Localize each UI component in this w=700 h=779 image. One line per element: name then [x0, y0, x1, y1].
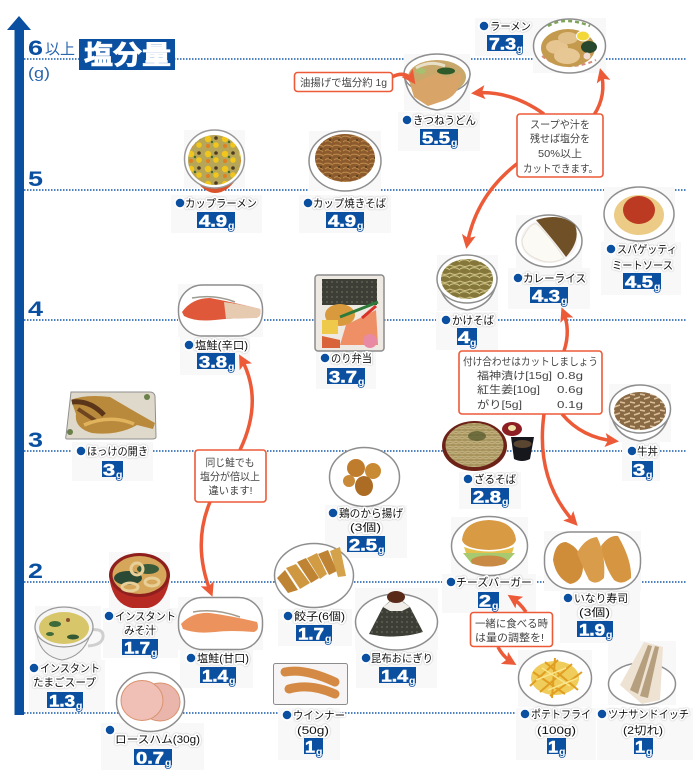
name: チーズバーガー [456, 575, 532, 589]
value: 4 [458, 328, 471, 347]
value [634, 738, 653, 758]
axis tick labels: 1 [30, 691, 38, 714]
axis tick labels: (g) [28, 65, 50, 82]
value: 3 [633, 460, 645, 480]
food: ツナサンドイッチ(2切れ) 1g [597, 641, 693, 760]
name: ウインナー [293, 709, 345, 722]
arrow: sides note to curry rice [563, 311, 567, 351]
bullet [513, 273, 523, 283]
icon: ramen bowl [533, 18, 606, 73]
axis tick labels: 以上 [45, 41, 75, 58]
name line 2: (50g) [297, 725, 329, 737]
food: 牛丼 3g [609, 384, 671, 481]
callout: adjust portion: 一緒に食べる時 [475, 617, 548, 630]
value [327, 368, 365, 388]
name: カレーライス [523, 272, 586, 285]
bullet [29, 663, 39, 673]
callout: abura-age salt: 油揚げで塩分約 1g [300, 76, 387, 89]
arrow: combo note to burger [511, 597, 526, 612]
value: g [516, 43, 523, 55]
food: カップラーメン 4.9g [171, 130, 262, 233]
icon: nori bento [315, 275, 384, 351]
value: 7.3 [489, 34, 516, 54]
callout: leave the soup: 残せば塩分を [530, 132, 590, 145]
label panel [180, 335, 250, 375]
value [420, 128, 458, 149]
label panel [516, 708, 596, 760]
icon: salted salmon, salty [178, 284, 263, 337]
arrow: sides note to gyudon [562, 414, 615, 441]
icon: gyudon bowl [609, 384, 671, 442]
callout: cut the side dishes: 0.8g [557, 370, 583, 382]
value [102, 460, 123, 481]
value: g [357, 220, 363, 232]
name line 2: ミートソース [612, 260, 673, 272]
value: 1 [548, 738, 558, 756]
label panel [316, 352, 376, 389]
bullet [303, 198, 313, 208]
label panel [622, 442, 660, 481]
label panel [171, 195, 262, 233]
name line 2: (100g) [537, 725, 576, 737]
food: 鶏のから揚げ(3個) 2.5g [325, 448, 407, 558]
name: 鶏のから揚げ [339, 506, 403, 520]
callout: cut the side dishes [459, 351, 602, 414]
icon: gyoza plate [274, 544, 354, 608]
bullet [479, 21, 489, 31]
value: g [561, 295, 567, 307]
callout: adjust portion [470, 612, 552, 646]
value: 4.9 [328, 212, 356, 230]
value [296, 624, 332, 645]
value: g [451, 137, 457, 149]
bullet [446, 577, 456, 587]
value axis arrow [7, 16, 31, 715]
bullet [463, 474, 473, 484]
icon: cup yakisoba [309, 131, 381, 191]
name: 塩鮭(辛口) [195, 338, 248, 352]
value: 0.7 [136, 748, 164, 768]
name line 2: (2切れ) [623, 724, 663, 737]
food: インスタントたまごスープ 1.3g [29, 606, 105, 712]
label panel [72, 442, 153, 481]
label panel [597, 708, 693, 760]
name: ほっけの開き [87, 445, 148, 458]
label panel [436, 312, 498, 350]
value [326, 212, 364, 232]
callout: cut the side dishes: 0.6g [557, 384, 583, 396]
value: 3.8 [199, 352, 227, 372]
callout: leave the soup: 50%以上 [538, 148, 582, 160]
icon: tuna sandwich plate [608, 641, 676, 705]
value: 1.4 [381, 666, 409, 686]
value [197, 352, 235, 373]
axis tick labels: 5 [28, 168, 43, 191]
label panel [398, 112, 480, 151]
value [478, 592, 499, 612]
value: 3 [103, 460, 115, 480]
arrow: soup note to ramen [594, 72, 603, 115]
callout: same salmon [195, 450, 266, 502]
callout: cut the side dishes: 福神漬け[15g] [477, 369, 552, 382]
callout: same salmon: 同じ鮭でも [206, 456, 254, 469]
value: 4.9 [199, 212, 227, 230]
name: 昆布おにぎり [371, 651, 433, 665]
icon: ham plate [116, 672, 184, 732]
label panel [508, 268, 590, 309]
value [623, 272, 661, 293]
label panel [325, 505, 407, 558]
food: ラーメン 7.3g [475, 18, 606, 73]
value [471, 488, 509, 508]
name line 2: (3個) [579, 606, 610, 619]
icon: zaru soba [442, 421, 534, 471]
value [632, 460, 653, 481]
food: ウインナー(50g) 1g [274, 664, 348, 760]
bullet [105, 725, 115, 735]
gridlines [24, 59, 687, 713]
name: きつねうどん [413, 114, 476, 127]
callout: leave the soup [517, 114, 603, 177]
callout: cut the side dishes: 紅生姜[10g] [477, 383, 540, 396]
value: g [492, 600, 498, 612]
value: 1.9 [579, 620, 605, 640]
label panel [278, 708, 340, 760]
name: かけそば [452, 314, 494, 327]
value [347, 536, 385, 556]
value [379, 666, 416, 687]
name: 塩鮭(甘口) [197, 651, 249, 665]
food: のり弁当 3.7g [315, 275, 384, 389]
value: 3.7 [329, 368, 357, 386]
label panel [601, 242, 681, 295]
arrow: sides note to inari [542, 414, 575, 523]
icon: salted salmon, mild [178, 597, 263, 650]
icon: french fries plate [518, 650, 592, 707]
icon: miso soup bowl [109, 552, 170, 608]
value: g [116, 469, 122, 481]
name: スパゲッティ [617, 243, 677, 256]
icon: cheeseburger [451, 516, 528, 576]
name: カップ焼きそば [313, 197, 386, 210]
icon: spaghetti plate [604, 187, 675, 242]
food: ロースハム(30g) 0.7g [101, 672, 204, 770]
bullet [402, 115, 412, 125]
name: 牛丼 [637, 444, 658, 458]
value: g [228, 361, 234, 373]
name: カップラーメン [185, 197, 257, 210]
arrow: combo note to fries [498, 647, 513, 663]
icon: kombu onigiri [355, 588, 438, 650]
bullet [184, 340, 194, 350]
name: いなり寿司 [574, 591, 628, 605]
value: g [409, 675, 415, 687]
bullet [175, 198, 185, 208]
icon: kitsune udon bowl [404, 54, 470, 111]
food: 昆布おにぎり 1.4g [355, 588, 438, 688]
value: 5.5 [422, 128, 450, 148]
icon: inari sushi [544, 531, 641, 591]
name line 2: たまごスープ [33, 675, 96, 689]
icon: curry rice plate [516, 215, 582, 268]
axis tick labels: 6 [28, 37, 43, 60]
callout: cut the side dishes: 0.1g [557, 399, 583, 411]
value: g [378, 544, 384, 556]
name: ロースハム(30g) [115, 733, 200, 746]
callout: leave the soup: スープや汁を [530, 118, 590, 131]
bullet [597, 709, 607, 719]
value: g [654, 281, 660, 293]
arrow: salmon note to salty salmon [240, 358, 252, 450]
bullet [563, 593, 573, 603]
icon: egg soup cup [35, 606, 103, 660]
food: スパゲッティミートソース 4.5g [601, 187, 681, 295]
food: 塩鮭(辛口) 3.8g [178, 284, 263, 375]
food: 塩鮭(甘口) 1.4g [178, 597, 263, 688]
axis tick labels: 2 [28, 560, 43, 583]
value: 1.7 [298, 624, 324, 644]
label panel [299, 195, 391, 233]
name: ポテトフライ [531, 708, 591, 721]
value [134, 748, 172, 769]
bullet [520, 709, 530, 719]
value [122, 638, 158, 659]
value: g [316, 746, 322, 758]
arrow: salmon note to mild salmon [201, 502, 211, 593]
value: g [229, 675, 235, 687]
food: カレーライス 4.3g [508, 215, 590, 309]
axis tick labels: 3 [28, 429, 43, 452]
value: g [76, 700, 82, 712]
label panel [103, 608, 178, 658]
food: ざるそば 2.8g [442, 421, 534, 509]
value [530, 286, 568, 307]
icon: karaage plate [330, 448, 400, 506]
label panel [356, 650, 437, 688]
name: インスタント [115, 610, 176, 623]
name: ざるそば [474, 472, 516, 486]
label panel [442, 574, 536, 613]
food: 餃子(6個) 1.7g [274, 544, 354, 646]
value [577, 620, 613, 641]
bullet [328, 508, 338, 518]
food: インスタントみそ汁 1.7g [103, 552, 178, 659]
label panel [101, 723, 204, 770]
icon: grilled hokke [66, 392, 156, 439]
bullet [76, 446, 86, 456]
value: 4.3 [532, 286, 560, 306]
arrow: abura-age to udon [392, 74, 413, 81]
bullet [606, 244, 616, 254]
value: 2.5 [349, 536, 377, 554]
axis tick labels [28, 37, 75, 714]
label panel [560, 590, 640, 643]
value: 1.7 [124, 638, 150, 658]
name: 餃子(6個) [294, 610, 345, 623]
value: g [358, 376, 364, 388]
icon: sausage tray [274, 664, 348, 704]
value: g [228, 220, 234, 232]
bullet [282, 710, 292, 720]
label panel [278, 609, 352, 646]
callout: cut the side dishes: 付け合わせはカットしましょう [463, 355, 598, 368]
food: ポテトフライ(100g) 1g [516, 650, 596, 760]
value [487, 34, 523, 55]
name line 2: みそ汁 [124, 624, 156, 637]
value: g [606, 629, 612, 641]
food: かけそば 4g [436, 255, 498, 350]
food: きつねうどん 5.5g [398, 54, 480, 151]
axis tick labels: 4 [28, 298, 43, 321]
callout: same salmon: 違います! [208, 484, 252, 497]
bullet [186, 653, 196, 663]
callout: abura-age salt [294, 72, 392, 92]
label panel [475, 18, 535, 56]
value [200, 666, 236, 687]
value: g [646, 746, 652, 758]
icon: cup ramen [184, 130, 245, 193]
callout: same salmon: 塩分が倍以上 [200, 470, 260, 483]
value [547, 738, 566, 758]
name line 2: (3個) [350, 521, 381, 534]
food: カップ焼きそば 4.9g [299, 131, 391, 233]
title: 塩分量 [84, 40, 171, 70]
name: ツナサンドイッチ [608, 708, 689, 721]
food: ほっけの開き 3g [66, 392, 156, 481]
name: のり弁当 [331, 351, 372, 365]
bullet [627, 446, 637, 456]
label panel [459, 472, 521, 509]
bullet [361, 653, 371, 663]
value [47, 692, 83, 712]
label panel [180, 650, 253, 688]
value [197, 212, 235, 232]
food: いなり寿司(3個) 1.9g [544, 531, 641, 643]
value: 2 [479, 592, 491, 610]
callout: adjust portion: は量の調整を! [475, 631, 544, 644]
bullet [441, 315, 451, 325]
arrow: soup note to udon [475, 93, 544, 114]
bullet [320, 353, 330, 363]
value: g [470, 337, 476, 349]
value: g [559, 746, 565, 758]
name: ラーメン [490, 21, 531, 33]
name: インスタント [40, 662, 100, 675]
value: g [646, 469, 652, 481]
label panel [29, 660, 105, 712]
food: チーズバーガー 2g [442, 516, 536, 613]
value [457, 328, 477, 349]
value: g [502, 496, 508, 508]
bullet [283, 611, 293, 621]
value: 4.5 [625, 272, 653, 292]
icon: kake soba bowl [437, 255, 498, 311]
value: 1.3 [49, 692, 75, 710]
value [304, 738, 323, 758]
value: 2.8 [473, 488, 501, 506]
value: g [151, 647, 157, 659]
callout: leave the soup: カットできます。 [523, 163, 598, 175]
value: 1.4 [202, 666, 229, 686]
value: 1 [635, 738, 645, 756]
callout: cut the side dishes: がり[5g] [477, 398, 522, 411]
bullet [104, 611, 114, 621]
value: g [325, 633, 331, 645]
arrow: soup note to kake soba [467, 163, 518, 245]
value: g [165, 757, 171, 769]
value: 1 [305, 738, 315, 756]
